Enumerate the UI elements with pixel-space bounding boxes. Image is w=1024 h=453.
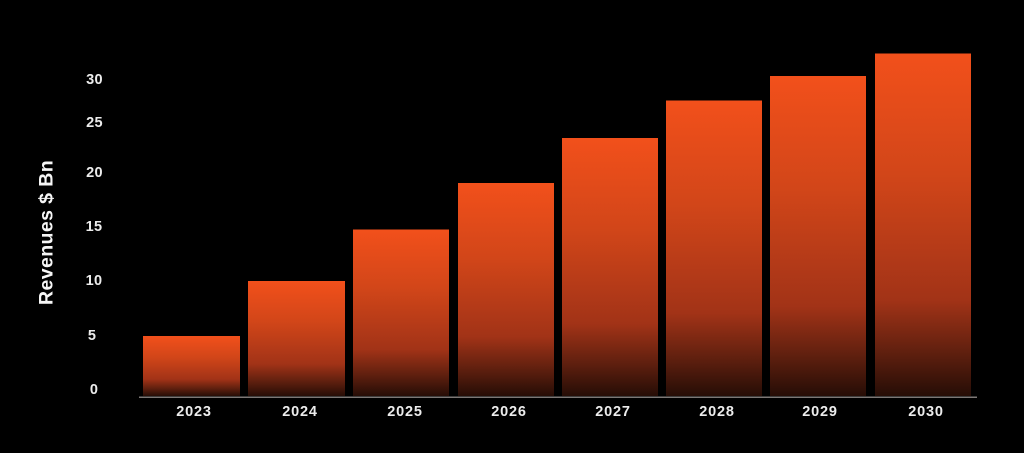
- x axis line: [139, 396, 977, 398]
- y axis labels: 10: [86, 273, 102, 289]
- y axis labels: [86, 72, 103, 398]
- y axis labels: 25: [86, 115, 103, 131]
- x axis labels: 2029: [802, 404, 838, 420]
- x axis labels: 2025: [387, 404, 423, 420]
- x axis labels: 2030: [908, 404, 944, 420]
- y axis labels: 5: [88, 328, 96, 344]
- y axis labels: 20: [86, 165, 103, 181]
- x axis labels: [176, 404, 944, 420]
- x axis labels: 2024: [282, 404, 318, 420]
- x axis labels: 2026: [491, 404, 527, 420]
- x axis labels: 2028: [699, 404, 735, 420]
- bars: [143, 54, 971, 396]
- y axis labels: 0: [90, 382, 98, 398]
- y axis labels: 30: [86, 72, 103, 88]
- x axis labels: 2027: [595, 404, 631, 420]
- y axis labels: 15: [86, 219, 102, 235]
- x axis labels: 2023: [176, 404, 212, 420]
- y axis title: Revenues $ Bn: [36, 160, 58, 305]
